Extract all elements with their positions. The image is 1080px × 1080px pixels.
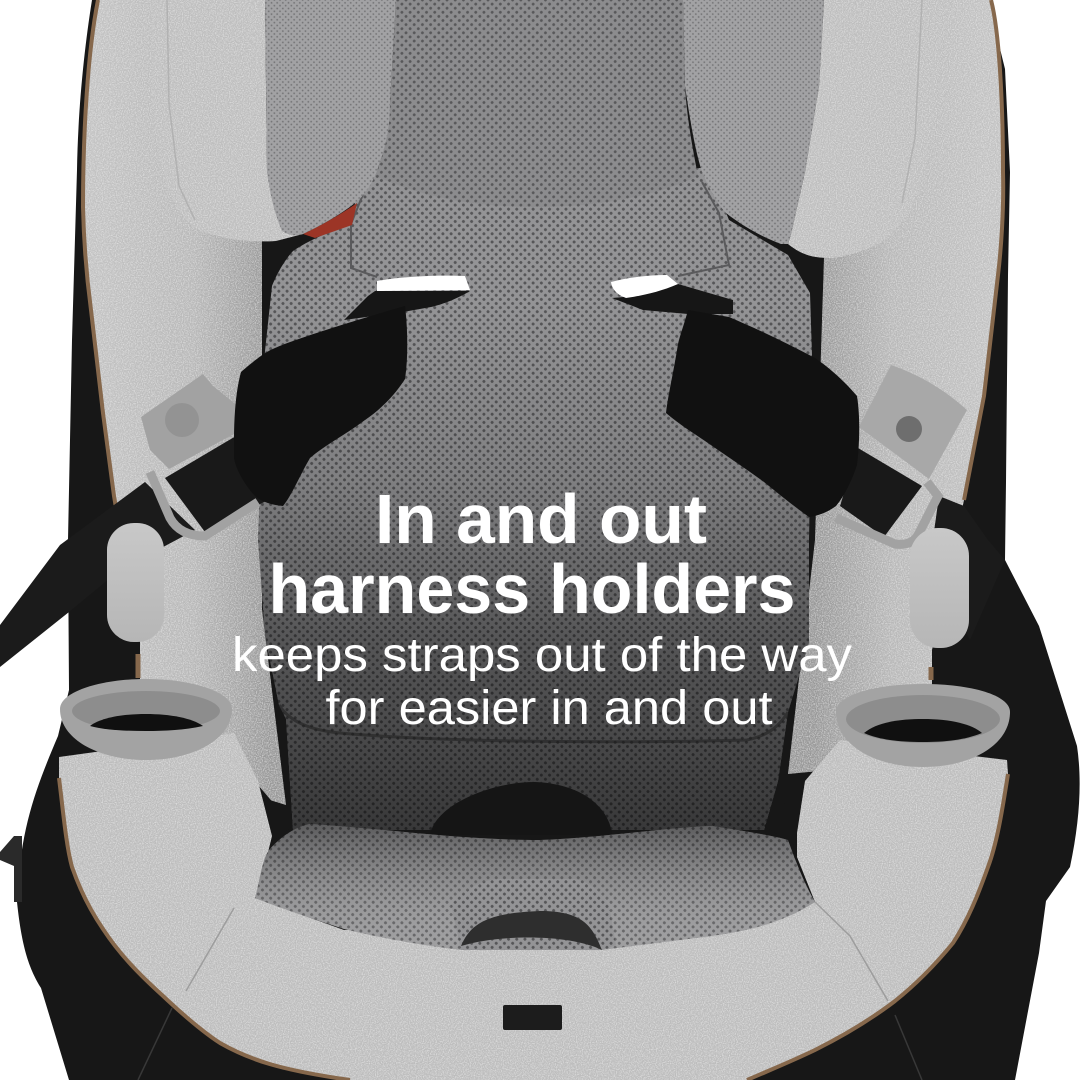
right cup opening <box>864 719 982 742</box>
seat mesh shading <box>255 824 815 950</box>
heading <box>268 480 796 628</box>
panel: lower seat <box>59 733 1008 1080</box>
bottom tan trim <box>59 774 1008 1080</box>
back mesh shading <box>258 168 812 830</box>
headrest right seam <box>902 0 922 203</box>
heading: harness holders <box>268 550 796 628</box>
heading: In and out <box>375 480 707 558</box>
left wedge <box>258 785 293 842</box>
icon: right cup holder <box>836 684 1010 767</box>
left buckle plate <box>141 374 238 469</box>
right buckle loop <box>836 482 938 544</box>
headrest right mesh side <box>683 0 824 244</box>
tan trim stub left <box>136 654 140 678</box>
right cushion seam <box>815 902 888 1001</box>
collar left edge <box>351 182 377 277</box>
panel: headrest <box>152 0 943 258</box>
right wedge <box>764 781 805 845</box>
subheading text: keeps straps out of the way <box>232 629 852 682</box>
headrest left wing <box>152 0 303 241</box>
right lower strap <box>930 496 1005 640</box>
icon: left harness holder <box>107 523 164 642</box>
right slot <box>611 275 678 298</box>
back mesh <box>258 168 812 830</box>
left slot strap <box>344 291 470 320</box>
right shell seam <box>895 1015 922 1080</box>
left strap lower <box>0 482 195 667</box>
dark gap behind seat back <box>250 236 830 850</box>
subheading text: for easier in and out <box>326 682 772 735</box>
right cup body <box>836 684 1010 767</box>
crotch strap hump <box>430 782 612 835</box>
headrest centre mesh <box>375 0 698 207</box>
left shoulder pad <box>234 306 407 506</box>
collar <box>351 168 729 281</box>
subheading text <box>232 629 852 735</box>
headrest right wing <box>788 0 943 258</box>
left cup body <box>60 679 232 760</box>
right buckle hole <box>896 416 922 442</box>
left side wall <box>84 0 286 805</box>
right side wall <box>788 0 1002 774</box>
panel: seat back mesh <box>258 168 812 830</box>
panel: right harness <box>666 310 1005 640</box>
right shoulder pad <box>666 310 859 517</box>
right cup inside <box>846 695 1000 743</box>
left buckle loop <box>150 472 258 536</box>
icon: left cup holder <box>60 679 232 760</box>
front buckle slot <box>503 1005 562 1030</box>
headrest left seam <box>167 0 195 220</box>
right slot strap <box>612 284 733 314</box>
left belt <box>165 436 278 532</box>
headrest left mesh side <box>265 0 396 235</box>
left cushion seam <box>186 908 234 991</box>
lower pad edge <box>279 705 788 742</box>
panel: left harness <box>0 306 407 667</box>
seat dip dark arc <box>461 911 602 950</box>
icon: right harness holder <box>910 528 969 648</box>
tan trim left <box>83 0 130 590</box>
headrest support red <box>303 203 357 238</box>
left buckle button <box>165 403 199 437</box>
side clip on shell <box>0 836 22 902</box>
tan trim stub right <box>928 667 934 680</box>
collar right edge <box>678 182 729 276</box>
left shell seam <box>138 1008 172 1080</box>
right buckle plate <box>859 365 967 479</box>
left slot <box>377 276 470 291</box>
tan trim right <box>964 0 1003 500</box>
seat mesh <box>255 824 815 950</box>
seat fabric and bolsters <box>59 733 1008 1080</box>
left cup opening <box>90 714 203 731</box>
seat centre dip <box>451 879 616 950</box>
left cup inside <box>72 691 220 731</box>
right belt <box>840 448 922 537</box>
